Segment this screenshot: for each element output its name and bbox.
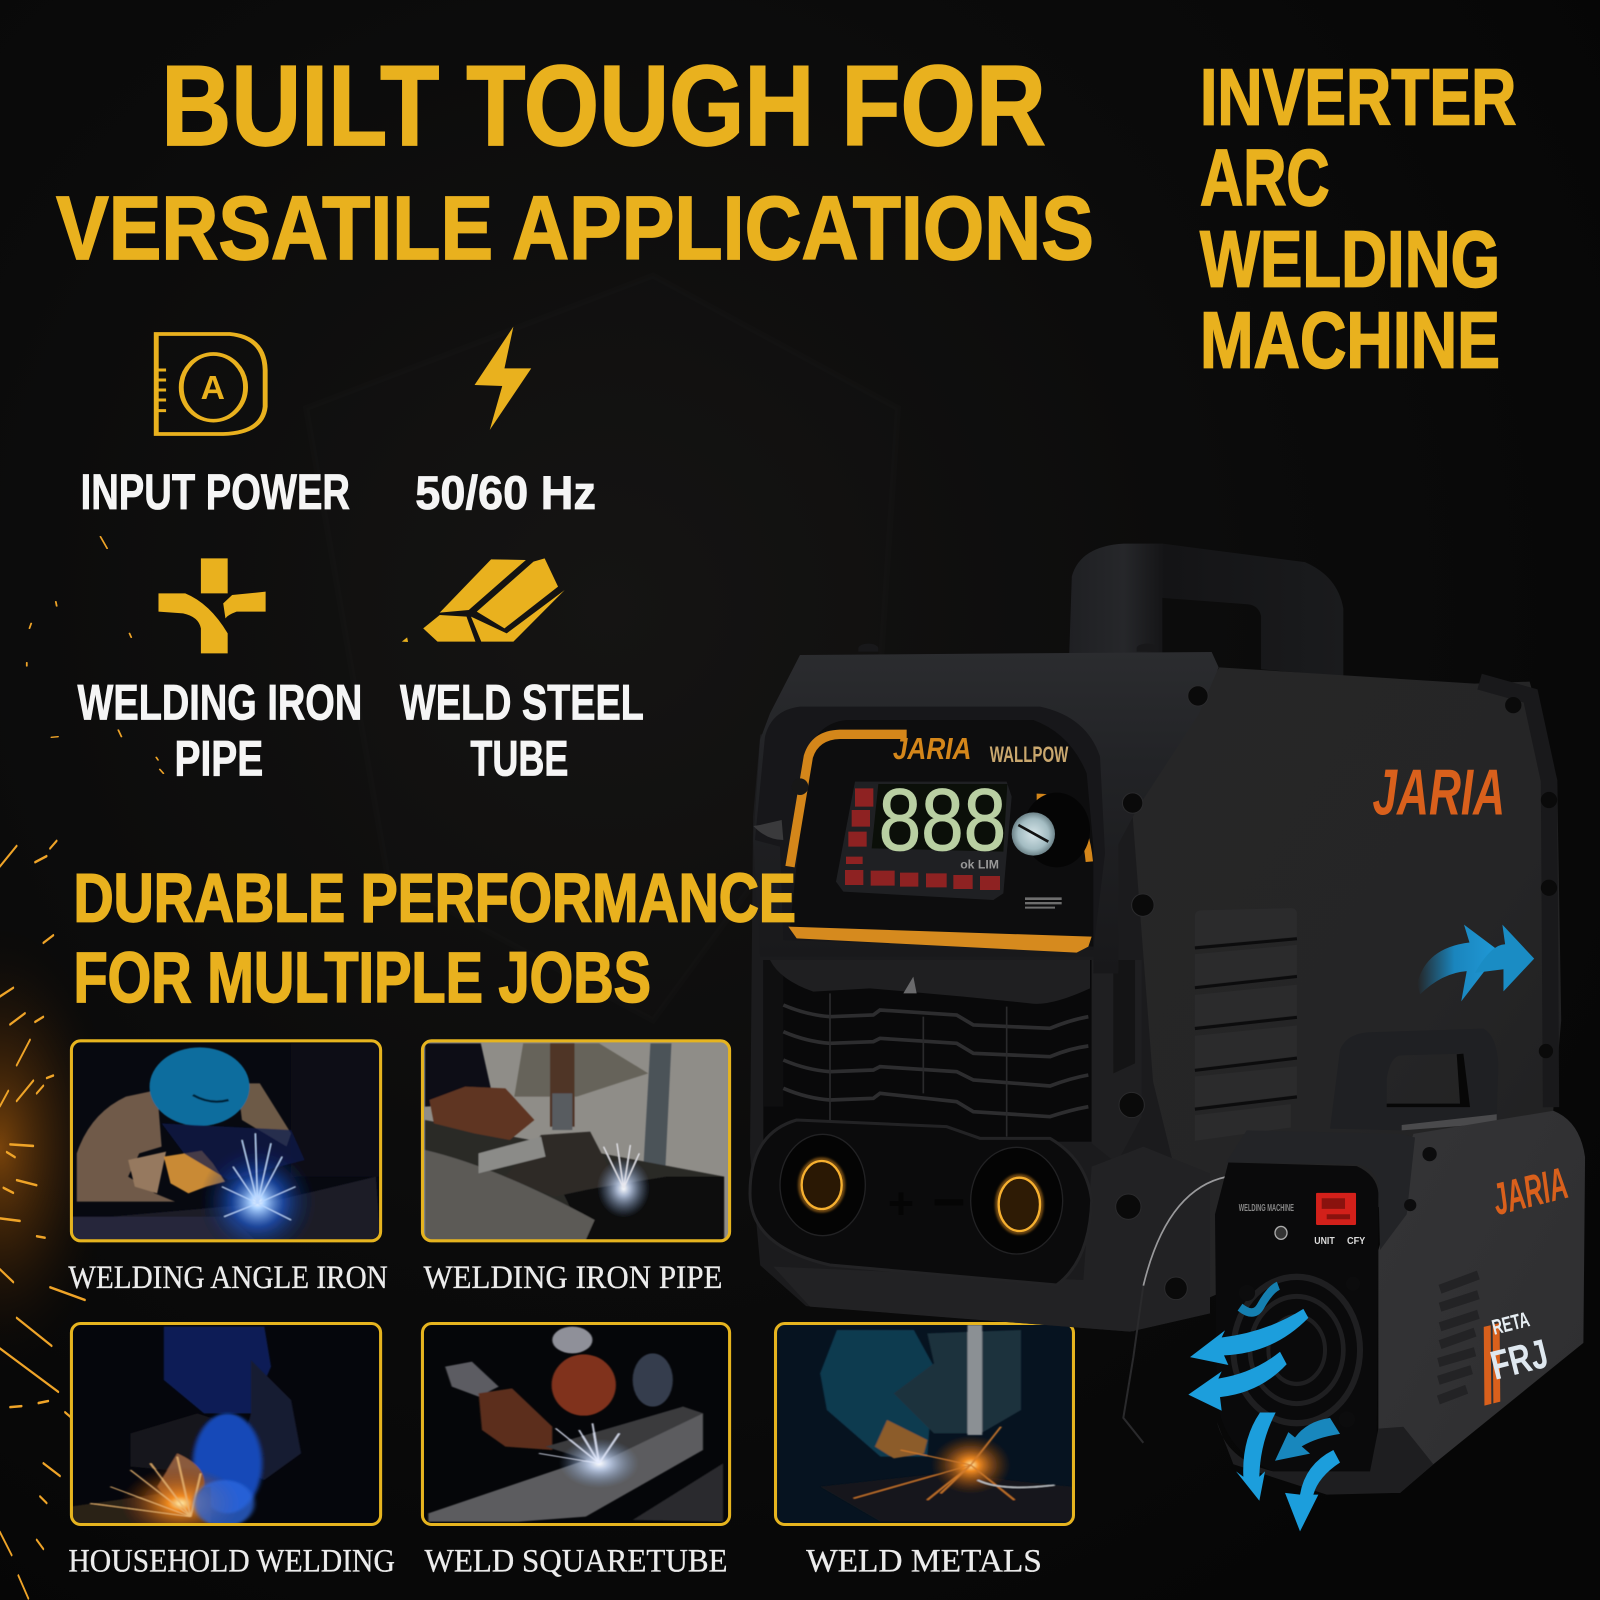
small indicator (1275, 1226, 1287, 1239)
faint shield watermark (306, 276, 898, 1020)
fine print (1025, 897, 1062, 909)
small handle (1330, 1029, 1498, 1130)
photo frame 5 (776, 1323, 1073, 1524)
photo: welding angle iron (73, 1042, 379, 1240)
caption: weld squaretube: WELD SQUARETUBE (424, 1543, 728, 1579)
label: welding iron pipe (78, 674, 362, 787)
label: 50/60 Hz: 50/60 Hz (415, 467, 596, 519)
top bolts (858, 644, 1157, 652)
icon: iron pipe joint (158, 558, 266, 653)
small airflow arrows (1188, 1286, 1340, 1531)
small welding machine (1123, 1029, 1585, 1531)
label: input power: INPUT POWER (81, 464, 350, 520)
heading: durable performance: DURABLE PERFORMANCE (73, 860, 796, 936)
label: weld steel tube: TUBE (470, 731, 568, 787)
icon: steel tube (402, 558, 565, 642)
heading: for multiple jobs: FOR MULTIPLE JOBS (73, 938, 651, 1018)
label: weld steel tube: WELD STEEL (400, 674, 644, 730)
title: built tough for: BUILT TOUGH FOR (161, 43, 1046, 170)
photo frame 3 (71, 1323, 381, 1524)
panel screw (792, 778, 808, 795)
photo frame 4 (422, 1323, 730, 1524)
icon: lightning bolt (475, 327, 531, 430)
digital readout: 888 (879, 771, 1006, 869)
heading: inverter arc welding machine: MACHINE (1200, 295, 1500, 384)
polarity marks: + (888, 1177, 914, 1228)
switch labels (1239, 1203, 1365, 1247)
panel logo: JARIA (893, 732, 971, 766)
heading: inverter arc welding machine (1200, 52, 1516, 384)
display housing (836, 782, 1012, 900)
polarity marks: − (932, 1170, 966, 1234)
flying sparks (0, 537, 163, 1598)
label: welding iron pipe: WELDING IRON (78, 674, 362, 730)
hood screws (1122, 686, 1208, 916)
blue airflow arrows (1417, 925, 1534, 1001)
side logo: JARIA (1372, 755, 1505, 828)
spark glow (0, 867, 204, 1439)
power switch (1316, 1193, 1356, 1225)
knob (1012, 793, 1090, 867)
small decal (1464, 1305, 1556, 1406)
small front face (1215, 1162, 1378, 1471)
small base (1217, 1421, 1433, 1495)
caption: welding angle iron: WELDING ANGLE IRON (68, 1260, 388, 1296)
orange knob arc (1037, 797, 1089, 862)
heading: inverter arc welding machine: WELDING (1200, 215, 1500, 304)
digit window (872, 784, 1007, 852)
small body side (1378, 1111, 1585, 1493)
photo: household welding (72, 1326, 302, 1523)
orange trim (790, 734, 907, 867)
icon: ammeter: A (201, 370, 225, 407)
title: versatile applications: VERSATILE APPLICATIONS (56, 179, 1094, 279)
lower front vents and socket panel (750, 960, 1210, 1332)
side vents (1195, 908, 1297, 1141)
label: welding iron pipe: PIPE (174, 731, 263, 787)
small decal: RETA (1490, 1307, 1532, 1340)
photo: welding iron pipe (422, 1041, 730, 1241)
front body (750, 714, 1210, 1332)
icon: ammeter (156, 334, 265, 434)
arch lip (755, 707, 1105, 950)
small side stripes (1438, 1275, 1478, 1400)
large welding machine (750, 544, 1561, 1332)
heading: inverter arc welding machine: ARC (1200, 133, 1330, 222)
photo: weld square tube (422, 1323, 730, 1524)
caption: weld metals: WELD METALS (806, 1543, 1042, 1579)
switch labels: CFY (1347, 1236, 1365, 1247)
handle (1069, 544, 1343, 676)
small screws (1239, 1147, 1437, 1428)
red buttons (845, 788, 1000, 890)
photo frame 2 (422, 1041, 730, 1241)
caption: household welding: HOUSEHOLD WELDING (68, 1543, 395, 1579)
photo frame 1 (71, 1041, 381, 1241)
panel model text: WALLPOW (990, 742, 1069, 767)
fan (1233, 1277, 1360, 1423)
photo: weld metals (776, 1323, 1073, 1524)
small decal: FRJ (1486, 1330, 1552, 1389)
caption: welding iron pipe: WELDING IRON PIPE (423, 1260, 722, 1296)
switch labels: UNIT (1314, 1236, 1335, 1247)
label: weld steel tube (400, 674, 644, 787)
heading: inverter arc welding machine: INVERTER (1200, 52, 1516, 141)
small hood (1226, 1130, 1415, 1250)
recess (790, 720, 1093, 947)
cable (1123, 1177, 1227, 1443)
right strap and side screws (1480, 682, 1557, 1107)
left hook (753, 820, 783, 840)
hood shell (753, 652, 1219, 973)
polarity marks (888, 1170, 966, 1234)
side panel (1122, 667, 1561, 1332)
hood and control panel (753, 644, 1219, 973)
switch labels: WELDING MACHINE (1239, 1203, 1294, 1214)
panel small label: ok LIM (960, 857, 999, 871)
orange bar (788, 927, 1092, 953)
